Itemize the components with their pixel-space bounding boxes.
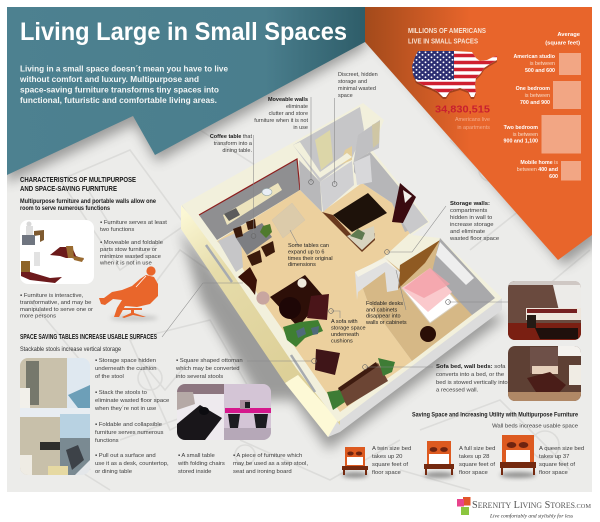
bullets: small table and piece of furniture: ▪ A small table <box>178 453 216 459</box>
bullets: stool features: or dining table <box>95 469 133 475</box>
illustration: apartment floor plan <box>181 103 502 437</box>
heading: average square feet: (square feet) <box>545 40 580 46</box>
heading: average square feet: Average <box>557 32 581 38</box>
bullets: stool features: furniture serves numerous <box>95 430 163 436</box>
callout: discreet storage: Discreet, hidden <box>338 72 378 78</box>
callout: sofa bed: a recessed wall. <box>436 388 479 394</box>
text: twin bed: takes up 20 <box>372 454 403 460</box>
bullets: furniture features: ▪ Moveable and foldable <box>100 240 164 246</box>
stat: one bedroom: One bedroom <box>516 86 550 92</box>
subheading: stackable stools: Stackable stools increase vertical storage <box>20 346 121 353</box>
sofa bed with plants <box>327 358 395 410</box>
callout: coffee table: transform into a <box>214 141 253 147</box>
callout: moveable walls: furniture when it is not <box>254 118 308 124</box>
photo: convertible wall units <box>20 358 90 475</box>
kitchen wall <box>199 159 300 240</box>
statistic: apartments <box>435 104 490 131</box>
bullets: small table and piece of furniture: may be used as a step stool, <box>233 461 308 467</box>
text: queen bed <box>539 446 584 476</box>
bullets: stool features: eliminate wasted floor space <box>95 398 170 404</box>
stat: one bedroom: is between <box>525 93 550 99</box>
bullets: furniture features: minimize wasted space <box>100 254 162 260</box>
photo: wall bed closed <box>508 281 581 340</box>
callout: foldable desks: and cabinets <box>366 307 397 313</box>
stat: one bedroom <box>516 81 581 109</box>
bullets: stool features: ▪ Storage space hidden <box>95 358 156 364</box>
bullet: furniture is interactive: manipulated to serve one or <box>20 307 93 313</box>
bullets: stool features: of the stool <box>95 374 124 380</box>
bullets: furniture features: ▪ Furniture serves at least <box>100 220 167 226</box>
bullets: stool features: ▪ Foldable and collapsible <box>95 422 163 428</box>
bullets: small table and piece of furniture: seat and ironing board <box>233 469 292 475</box>
stat: american studio: is between <box>530 61 555 67</box>
callout: storage walls: and eliminate <box>450 229 486 235</box>
intro text: space-saving furniture transforms tiny spaces into <box>20 84 219 94</box>
icon: twin bed <box>342 447 368 478</box>
callout: discreet storage: storage and <box>338 79 367 85</box>
icon: orange man in chair <box>99 266 158 321</box>
bullets: stool features: use it as a desk, countertop, <box>95 461 169 467</box>
stat: two bedroom: is between <box>513 132 538 138</box>
callout: sofa storage: storage space <box>331 326 366 332</box>
icon: queen bed <box>500 435 536 478</box>
intro text: without comfort and luxury. Multipurpose and <box>19 74 199 84</box>
logo: serenity living stores <box>457 497 591 520</box>
stat: mobile home: Mobile home is <box>520 160 558 166</box>
callout: moveable walls: clutter and store <box>269 111 308 117</box>
callout: moveable walls: eliminate <box>286 104 308 110</box>
subheading: wall beds: Wall beds increase usable space <box>492 424 579 430</box>
callout: sofa storage: underneath <box>331 332 359 338</box>
stat: american studio <box>513 53 581 75</box>
bullets: furniture features <box>99 220 167 266</box>
bullet: furniture is interactive: more persons <box>20 314 56 320</box>
callout: storage walls: increase storage <box>450 222 494 228</box>
callout: foldable desks: Foldable desks <box>366 301 403 307</box>
bullets: stool features: ▪ Pull out a surface and <box>95 453 156 459</box>
callout: sofa bed: converts into a bed, or the <box>436 372 505 378</box>
bullets: furniture features: parts stow furniture or <box>100 247 157 253</box>
logo: serenity living stores: SERENITY LIVING STORES.COM <box>472 500 591 511</box>
text: full bed: square feet of <box>459 462 495 468</box>
stat: american studio: American studio <box>513 54 556 60</box>
bullets: stool features: functions <box>95 438 119 444</box>
bullets: small table and piece of furniture: with folding chairs <box>177 461 225 467</box>
inner walls and closets <box>293 107 428 232</box>
callout: expandable tables: times their original <box>288 256 333 262</box>
intro text: Living in a small space doesn´t mean you have to live <box>20 64 228 74</box>
stat: two bedroom: 900 and 1,100 <box>504 138 538 144</box>
heading: characteristics: CHARACTERISTICS OF MULTIPURPOSE <box>20 175 136 184</box>
callout: sofa storage: A sofa with <box>331 319 358 325</box>
text: full bed <box>459 446 495 476</box>
text: twin bed: floor space <box>372 470 402 476</box>
callout: expandable tables: dimensions <box>288 262 316 268</box>
door <box>392 183 416 223</box>
heading: millions of americans <box>408 28 486 46</box>
text: queen bed: takes up 37 <box>539 454 569 460</box>
callout: foldable desks <box>365 301 407 326</box>
callout: storage walls: compartments <box>450 208 487 214</box>
bullets: furniture features: two functions <box>100 227 134 233</box>
icon: us flag map <box>412 51 497 99</box>
callout: sofa bed <box>436 364 508 394</box>
bullets: stool features: when they´re not in use <box>94 406 157 412</box>
icon: full bed <box>424 441 454 478</box>
intro text: functional, futuristic and comfortable living areas. <box>20 95 217 105</box>
callout: foldable desks: disappear into <box>366 314 401 320</box>
stat: two bedroom: Two bedroom <box>504 125 538 131</box>
bullet: square ottoman <box>175 358 243 380</box>
callout: coffee table <box>210 134 253 154</box>
callout: moveable walls: Moveable walls <box>268 97 308 103</box>
bullets: small table and piece of furniture: ▪ A piece of furniture which <box>233 453 302 459</box>
bedroom <box>355 238 495 361</box>
callout: moveable walls <box>254 97 308 131</box>
heading: characteristics: AND SPACE-SAVING FURNITURE <box>20 184 117 193</box>
bullet: furniture is interactive <box>20 293 93 320</box>
subheading: multipurpose furniture <box>20 198 156 212</box>
photo: foldable furniture <box>20 220 94 284</box>
stat: mobile home <box>517 160 581 180</box>
heading: millions of americans: LIVE IN SMALL SPACES <box>408 38 478 46</box>
bullet: square ottoman: ▪ Square shaped ottoman <box>176 358 243 364</box>
photo: ottoman tables <box>177 384 271 440</box>
text: queen bed: square feet of <box>539 462 575 468</box>
leader lines <box>162 97 515 369</box>
callout: discreet storage: space <box>338 93 353 99</box>
text: twin bed: square feet of <box>372 462 408 468</box>
callout: expandable tables: expand up to 6 <box>288 249 324 255</box>
statistic: apartments: in apartments <box>457 125 490 131</box>
panel: teal intro banner <box>7 7 365 175</box>
stat: mobile home: 600 <box>549 174 558 180</box>
callout: sofa storage: cushions <box>331 338 353 344</box>
text: twin bed <box>372 446 411 476</box>
living room set <box>238 267 340 375</box>
callout: moveable walls: in use <box>293 125 308 131</box>
callout: storage walls: Storage walls: <box>450 201 490 207</box>
bullets: small table and piece of furniture: stored inside <box>178 469 212 475</box>
callout: coffee table: Coffee table that <box>210 134 252 140</box>
bullets: stool features <box>94 358 170 475</box>
heading: average square feet <box>545 32 581 46</box>
bullets: furniture features: when it is not in use <box>99 260 152 266</box>
heading: millions of americans: MILLIONS OF AMERICANS <box>408 28 486 35</box>
callout: foldable desks: walls or cabinets <box>365 320 407 326</box>
bullet: furniture is interactive: transformative, and may be <box>20 300 92 306</box>
heading: space saving tables: SPACE SAVING TABLES INCREASE USABLE SURFACES <box>20 332 157 341</box>
callout: coffee table: dining table. <box>222 148 252 154</box>
callout: discreet storage <box>338 72 378 99</box>
callout: expandable tables <box>288 243 333 268</box>
callout: expandable tables: Some tables can <box>288 243 329 249</box>
callout: sofa storage <box>331 319 366 344</box>
dining set <box>233 203 305 266</box>
bullet: furniture is interactive: ▪ Furniture is interactive, <box>20 293 84 299</box>
title: Living Large in Small Spaces <box>20 18 347 46</box>
text: full bed: A full size bed <box>459 446 495 452</box>
stat: one bedroom: 700 and 900 <box>520 100 550 106</box>
callout: discreet storage: minimal wasted <box>338 86 376 92</box>
callout: storage walls <box>449 201 500 242</box>
text: full bed: takes up 28 <box>459 454 490 460</box>
callout: storage walls: wasted floor space <box>449 236 500 242</box>
callout: sofa bed: Sofa bed, wall beds: sofa <box>436 364 506 370</box>
statistic: apartments: 34,830,515 <box>435 104 490 116</box>
heading: characteristics <box>20 175 136 193</box>
intro text <box>19 64 228 105</box>
stat: mobile home: between 400 and <box>517 167 558 173</box>
text: full bed: floor space <box>459 470 489 476</box>
stat: american studio: 500 and 600 <box>525 68 555 74</box>
subheading: multipurpose furniture: room to serve numerous functions <box>20 205 110 212</box>
statistic: apartments: Americans live <box>455 117 490 123</box>
bullets: small table and piece of furniture <box>177 453 308 475</box>
callout: storage walls: hidden in wall to <box>450 215 493 221</box>
black rug and bed base <box>322 193 387 252</box>
logo: serenity living stores: Live comfortably and stylishly for less <box>489 512 573 520</box>
text: queen bed: A queen size bed <box>539 446 584 452</box>
callout: sofa bed: bed is stowed vertically into <box>436 380 508 386</box>
bullets: stool features: ▪ Stack the stools to <box>95 390 148 396</box>
stat: two bedroom <box>504 115 581 154</box>
bullet: square ottoman: into several stools <box>176 374 223 380</box>
floor <box>217 183 412 412</box>
text: queen bed: floor space <box>539 470 569 476</box>
bullets: stool features: underneath the cushion <box>95 366 157 372</box>
photo: wall bed open <box>508 346 581 401</box>
subheading: multipurpose furniture: Multipurpose furniture and portable walls allow one <box>20 198 156 205</box>
panel: orange statistics banner <box>365 7 592 260</box>
text: twin bed: A twin size bed <box>372 446 411 452</box>
window frames <box>291 355 315 392</box>
bullet: square ottoman: which may be converted <box>175 366 240 372</box>
